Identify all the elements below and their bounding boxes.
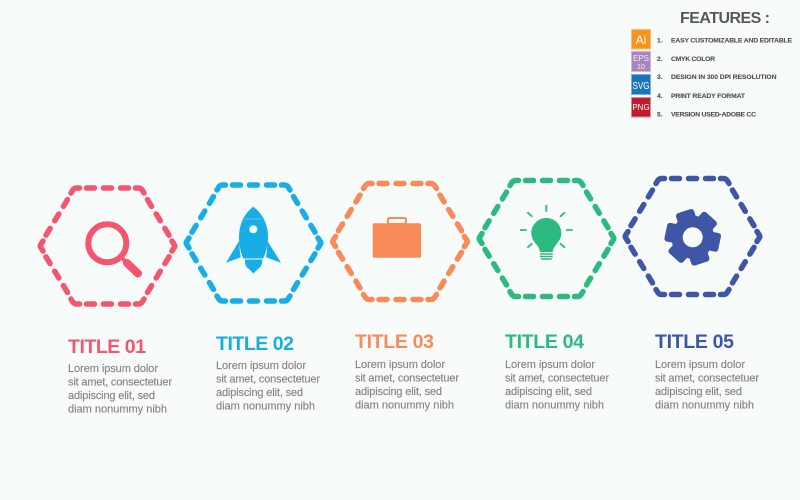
text block: title 04: diam nonummy nibh [505, 400, 604, 412]
text block: title 03: Lorem ipsum dolor [355, 359, 445, 371]
feature list [657, 38, 792, 118]
text block: title 05: TITLE 05 [655, 331, 734, 353]
hexagon 2: rocket [186, 185, 321, 301]
features panel [632, 10, 792, 118]
features heading: FEATURES : [680, 10, 770, 27]
text block: title 05: adipiscing elit, sed [655, 386, 742, 398]
text block: title 05 [655, 331, 759, 412]
icon: EPS badge: 10 [637, 64, 645, 71]
feature list: EASY CUSTOMIZABLE AND EDITABLE [671, 38, 792, 44]
icon: briefcase [373, 218, 421, 258]
text block: title 04: Lorem ipsum dolor [505, 359, 595, 371]
text block: title 02: Lorem ipsum dolor [216, 360, 306, 372]
hexagon 4: light bulb [479, 180, 614, 296]
text block: title 02: sit amet, consectetuer [216, 374, 320, 386]
feature list: DESIGN IN 300 DPI RESOLUTION [671, 74, 777, 81]
feature list: VERSION USED-ADOBE CC [671, 112, 756, 118]
icon: SVG badge [632, 74, 650, 94]
text block: title 04: TITLE 04 [505, 331, 584, 353]
hexagon 1: search [40, 188, 175, 304]
icon: EPS badge: EPS [633, 54, 649, 63]
hexagon 5: gear [625, 178, 760, 294]
feature list: 1. [657, 38, 663, 44]
icon: light bulb [520, 205, 573, 259]
icon: EPS badge [632, 52, 650, 72]
text block: title 01: Lorem ipsum dolor [68, 363, 158, 375]
text block: title 05: sit amet, consectetuer [655, 372, 759, 384]
text block: title 03: TITLE 03 [355, 331, 434, 353]
text block: title 03: adipiscing elit, sed [355, 386, 442, 398]
text block: title 02: adipiscing elit, sed [216, 387, 303, 399]
icon: PNG badge: PNG [632, 103, 650, 112]
feature list: 2. [657, 56, 663, 63]
icon: Ai badge: Ai [636, 33, 646, 47]
icon: PNG badge [632, 98, 650, 117]
text block: title 01: sit amet, consectetuer [68, 376, 172, 388]
icon: gear [664, 208, 722, 266]
text block: title 02 [216, 333, 320, 412]
icon: rocket [226, 207, 281, 274]
text block: title 01: TITLE 01 [68, 336, 146, 358]
feature list: 3. [657, 74, 663, 81]
icon: magnifying glass [88, 224, 138, 274]
feature list: 5. [657, 112, 663, 118]
text block: title 04 [505, 331, 609, 412]
text block: title 05: diam nonummy nibh [655, 400, 754, 412]
text block: title 04: adipiscing elit, sed [505, 386, 592, 398]
text block: title 05: Lorem ipsum dolor [655, 359, 745, 371]
feature list: CMYK COLOR [671, 56, 715, 63]
text block: title 01 [68, 336, 172, 416]
text block: title 03 [355, 331, 459, 412]
icon: Ai badge [632, 30, 650, 49]
text block: title 01: diam nonummy nibh [68, 404, 167, 416]
feature list: 4. [657, 93, 663, 100]
text block: title 02: diam nonummy nibh [216, 400, 315, 412]
hexagon 3: briefcase [333, 184, 467, 300]
text block: title 03: sit amet, consectetuer [355, 372, 459, 384]
text block: title 02: TITLE 02 [216, 333, 294, 355]
text block: title 03: diam nonummy nibh [355, 400, 454, 412]
text block: title 04: sit amet, consectetuer [505, 372, 609, 384]
text block: title 01: adipiscing elit, sed [68, 390, 155, 402]
feature list: PRINT READY FORMAT [671, 93, 746, 100]
icon: SVG badge: SVG [632, 81, 650, 92]
